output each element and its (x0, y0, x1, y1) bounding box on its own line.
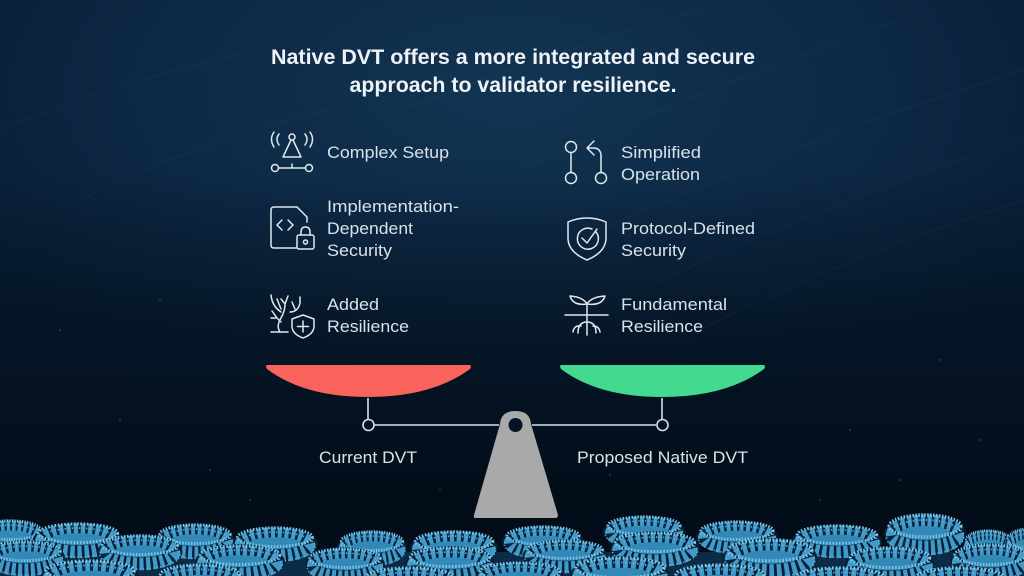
title: approach to validator resilience. (350, 74, 676, 97)
label: fundamental resilience: Resilience (621, 318, 703, 336)
icon: tree with shield (271, 295, 314, 338)
title: Native DVT offers a more integrated and secure (271, 46, 755, 69)
label: implementation-dependent security: Implementation- (327, 198, 459, 216)
label: simplified operation: Simplified (621, 144, 701, 162)
label: simplified operation (621, 144, 701, 184)
title (271, 46, 755, 97)
label: protocol-defined security: Security (621, 242, 687, 260)
textured discs along bottom (0, 513, 1024, 576)
label: implementation-dependent security: Security (327, 242, 393, 260)
label: protocol-defined security: Protocol-Defined (621, 220, 755, 238)
label: protocol-defined security (621, 220, 755, 260)
label: fundamental resilience (621, 296, 727, 336)
label: complex setup: Complex Setup (327, 144, 449, 162)
balance scale (266, 365, 765, 518)
green pan (560, 365, 765, 397)
label: added resilience: Resilience (327, 318, 409, 336)
label: proposed native DVT: Proposed Native DVT (577, 449, 748, 467)
fulcrum (474, 411, 558, 518)
icon: antenna network (272, 132, 312, 172)
icon: shield with check (568, 218, 606, 260)
label: implementation-dependent security: Dependent (327, 220, 413, 238)
label: current DVT: Current DVT (319, 449, 417, 467)
label: fundamental resilience: Fundamental (621, 296, 727, 314)
label: added resilience (327, 296, 409, 336)
icon: git branch flow (566, 141, 606, 184)
red pan (266, 365, 471, 397)
icon: plant with roots (565, 296, 608, 335)
beam and connectors (363, 398, 668, 430)
label: simplified operation: Operation (621, 166, 700, 184)
label: implementation-dependent security (327, 198, 459, 260)
label: added resilience: Added (327, 296, 379, 314)
icon: code document with lock (271, 207, 314, 249)
